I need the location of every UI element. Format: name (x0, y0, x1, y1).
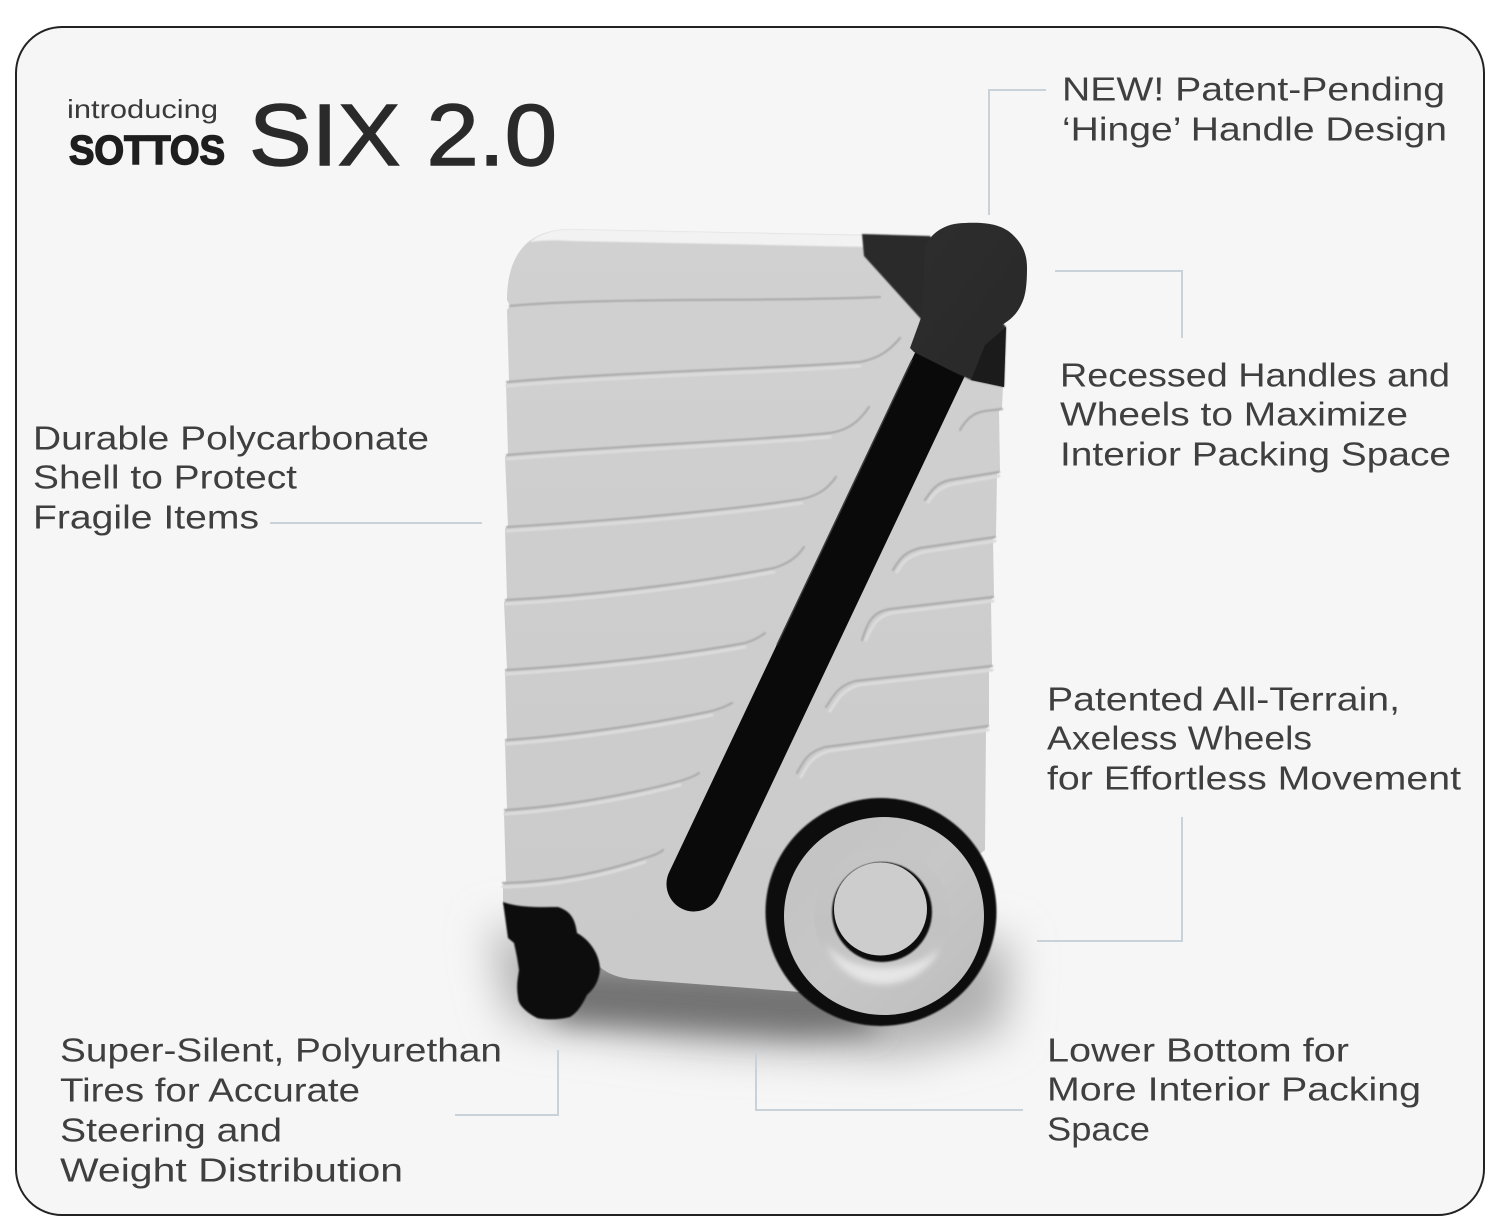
callout text: Weight Distribution (60, 1152, 403, 1190)
callout text: Patented All-Terrain, (1047, 682, 1400, 718)
callout text: Wheels to Maximize (1060, 396, 1408, 434)
leader line (756, 1052, 1023, 1110)
callout text (33, 420, 429, 536)
callout: lower bottom (756, 1032, 1421, 1148)
callout text: Interior Packing Space (1060, 436, 1451, 474)
leader line (989, 90, 1046, 215)
callout text: Tires for Accurate (60, 1072, 360, 1110)
callout text (1060, 358, 1451, 474)
callout: axeless wheels (1037, 682, 1462, 941)
rear caster wheel (503, 902, 600, 1019)
callout text: Durable Polycarbonate (33, 420, 429, 458)
callout text: ‘Hinge’ Handle Design (1062, 112, 1447, 148)
callout text: Steering and (60, 1112, 282, 1150)
suitcase illustration (490, 223, 1027, 1055)
main wheel (766, 798, 996, 1026)
leader line (270, 522, 482, 524)
heading: SIX 2.0: SIX 2.0 (249, 87, 557, 184)
brand: SOTTOS: SOTTOS (69, 127, 225, 173)
callout text (1062, 72, 1447, 148)
callout text: Recessed Handles and (1060, 358, 1450, 394)
left shell ridges (503, 297, 900, 887)
right shell ridges (797, 409, 1002, 777)
leader line (1055, 271, 1182, 338)
callout text (1047, 1032, 1421, 1148)
callout: polycarbonate shell (33, 420, 482, 536)
text: introducing: introducing (67, 94, 218, 124)
callout: polyurethane tires (60, 1032, 558, 1190)
callout text: More Interior Packing (1047, 1072, 1421, 1108)
callout text (60, 1032, 502, 1190)
top highlight (530, 229, 868, 247)
hinge handle (862, 223, 1027, 387)
callout text: Lower Bottom for (1047, 1032, 1349, 1070)
callout text: Axeless Wheels (1047, 720, 1312, 758)
callout text: Fragile Items (33, 500, 259, 536)
callout: hinge handle (989, 72, 1447, 215)
handle slot edge (777, 360, 912, 645)
telescoping handle bar (694, 360, 942, 884)
callout: recessed handles (1055, 271, 1451, 474)
callout text: for Effortless Movement (1047, 760, 1462, 798)
callout text: Shell to Protect (33, 460, 298, 496)
callout text (1047, 682, 1462, 798)
rim highlight (826, 945, 940, 984)
ground shadow (490, 925, 1010, 1055)
leader line (1037, 817, 1182, 941)
suitcase shell (503, 229, 1003, 992)
callout text: NEW! Patent-Pending (1062, 72, 1445, 108)
callout text: Space (1047, 1112, 1150, 1148)
title block (67, 87, 557, 184)
leader line (455, 1050, 558, 1115)
callout text: Super-Silent, Polyurethan (60, 1032, 502, 1070)
